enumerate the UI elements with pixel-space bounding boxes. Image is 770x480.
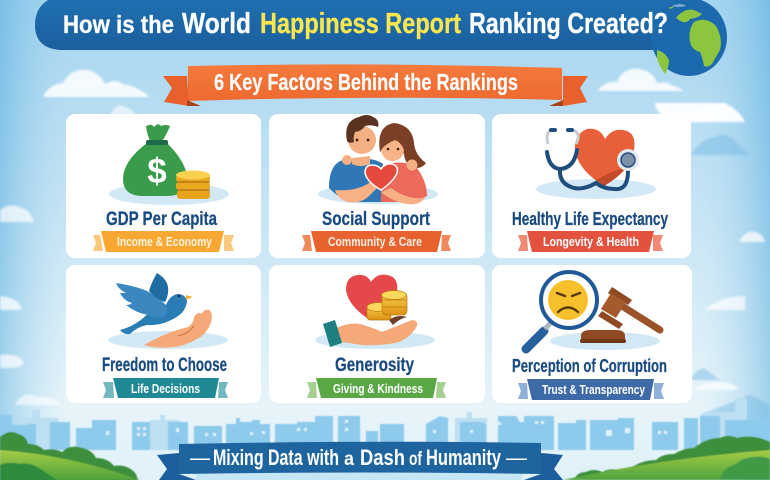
label ribbon xyxy=(103,378,228,398)
label ribbon: Life Decisions xyxy=(131,381,200,396)
panel: GDP per capita xyxy=(66,114,261,258)
label ribbon xyxy=(307,378,446,398)
label ribbon: Community & Care xyxy=(328,234,422,249)
title text: How is the xyxy=(63,11,174,39)
footer text: a xyxy=(344,449,354,470)
footer text: — xyxy=(506,445,527,470)
heading: Social Support xyxy=(322,209,431,230)
panel: freedom to choose xyxy=(66,265,261,403)
title text: Ranking Created? xyxy=(469,8,668,40)
icon: stethoscope and heart xyxy=(536,128,656,199)
footer ribbon xyxy=(157,442,563,480)
footer text: of xyxy=(409,449,422,470)
title text: World xyxy=(182,8,251,40)
panel: perception of corruption xyxy=(492,265,692,403)
label ribbon xyxy=(518,231,663,252)
panel: generosity xyxy=(269,265,485,403)
footer text: Dash xyxy=(360,445,405,470)
heading: Freedom to Choose xyxy=(102,355,227,376)
icon: money bag and coins: $ xyxy=(147,152,167,191)
footer text: Mixing Data with xyxy=(213,445,339,470)
label ribbon: Trust & Transparency xyxy=(542,382,646,397)
footer text: Humanity xyxy=(426,445,502,470)
label ribbon xyxy=(302,231,451,252)
icon: couple with heart xyxy=(318,115,438,204)
title text: Happiness Report xyxy=(260,8,461,40)
city skyline xyxy=(0,398,770,454)
label ribbon: Longevity & Health xyxy=(543,234,639,249)
label ribbon: Income & Economy xyxy=(117,234,213,249)
icon: magnifier, angry face and gavel xyxy=(526,272,660,350)
heading: Generosity xyxy=(335,355,414,376)
icon: bird and open hand xyxy=(108,273,228,349)
heading: Perception of Corruption xyxy=(512,356,667,376)
heading: GDP Per Capita xyxy=(106,209,217,230)
icon: hand with heart and coins xyxy=(315,275,435,349)
subtitle ribbon xyxy=(163,64,588,106)
icon: money bag and coins xyxy=(109,124,229,205)
icon: globe xyxy=(651,0,727,76)
hills and bushes xyxy=(0,432,770,480)
label ribbon xyxy=(518,379,664,400)
heading: Healthy Life Expectancy xyxy=(512,209,668,229)
panel: healthy life expectancy xyxy=(492,114,691,258)
label ribbon xyxy=(93,231,234,252)
subtitle text: 6 Key Factors Behind the Rankings xyxy=(214,69,518,95)
label ribbon: Giving & Kindness xyxy=(333,381,423,396)
panel: social support xyxy=(269,114,485,258)
footer text: — xyxy=(190,445,210,470)
title banner xyxy=(35,0,727,76)
